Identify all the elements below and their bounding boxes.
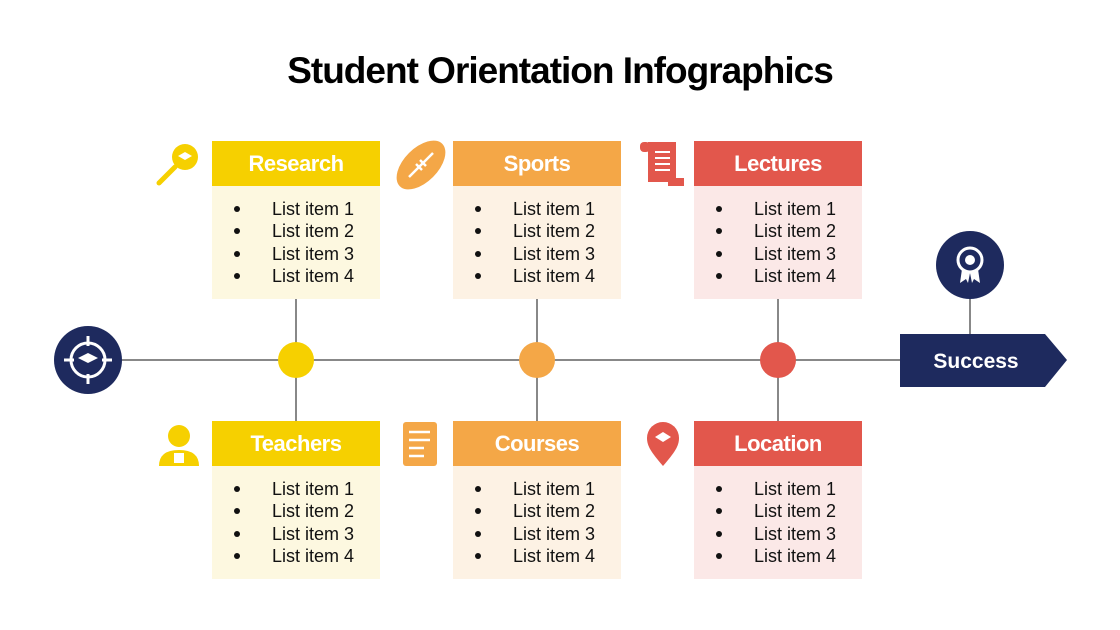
success arrow — [900, 334, 1067, 387]
panel: lectures: List item 3 — [754, 244, 836, 264]
panel: courses: List item 3 — [513, 524, 595, 544]
panel: teachers: List item 3 — [272, 524, 354, 544]
panel: location: Location — [734, 431, 822, 456]
panel: lectures: List item 2 — [754, 221, 836, 241]
panel: sports: Sports — [504, 151, 570, 176]
panel: sports: List item 4 — [513, 266, 595, 286]
icon: teacher — [159, 425, 199, 466]
panel: teachers: List item 4 — [272, 546, 354, 566]
icon: scroll — [640, 142, 684, 186]
panel: research: List item 4 — [272, 266, 354, 286]
panel: teachers: List item 2 — [272, 501, 354, 521]
panel: research: List item 3 — [272, 244, 354, 264]
panel: location: List item 3 — [754, 524, 836, 544]
panel: teachers: List item 1 — [272, 479, 354, 499]
panel: research — [212, 141, 380, 299]
panel: research: List item 1 — [272, 199, 354, 219]
icon: award — [936, 231, 1004, 299]
panel: lectures: List item 1 — [754, 199, 836, 219]
success arrow: Success — [933, 350, 1019, 373]
panel: courses — [453, 421, 621, 579]
panel: sports: List item 1 — [513, 199, 595, 219]
icon: football — [396, 140, 446, 190]
panel: lectures: Lectures — [734, 151, 822, 176]
icon: start target — [54, 326, 122, 394]
panel: sports: List item 3 — [513, 244, 595, 264]
panel: lectures — [694, 141, 862, 299]
panel: sports: List item 2 — [513, 221, 595, 241]
panel: location: List item 4 — [754, 546, 836, 566]
panel: location: List item 1 — [754, 479, 836, 499]
panel: teachers: Teachers — [250, 431, 341, 456]
panel: lectures: List item 4 — [754, 266, 836, 286]
panel: courses: List item 1 — [513, 479, 595, 499]
title: Student Orientation Infographics — [287, 50, 833, 91]
panel: location — [694, 421, 862, 579]
panel: teachers — [212, 421, 380, 579]
icon: checklist — [403, 422, 437, 466]
panel: location: List item 2 — [754, 501, 836, 521]
panel: research: List item 2 — [272, 221, 354, 241]
panel: courses: List item 4 — [513, 546, 595, 566]
panel: courses: Courses — [495, 431, 579, 456]
panel: sports — [453, 141, 621, 299]
icon: magnifier — [156, 144, 198, 186]
panel: research: Research — [248, 151, 344, 176]
icon: location pin — [647, 422, 679, 466]
panel: courses: List item 2 — [513, 501, 595, 521]
